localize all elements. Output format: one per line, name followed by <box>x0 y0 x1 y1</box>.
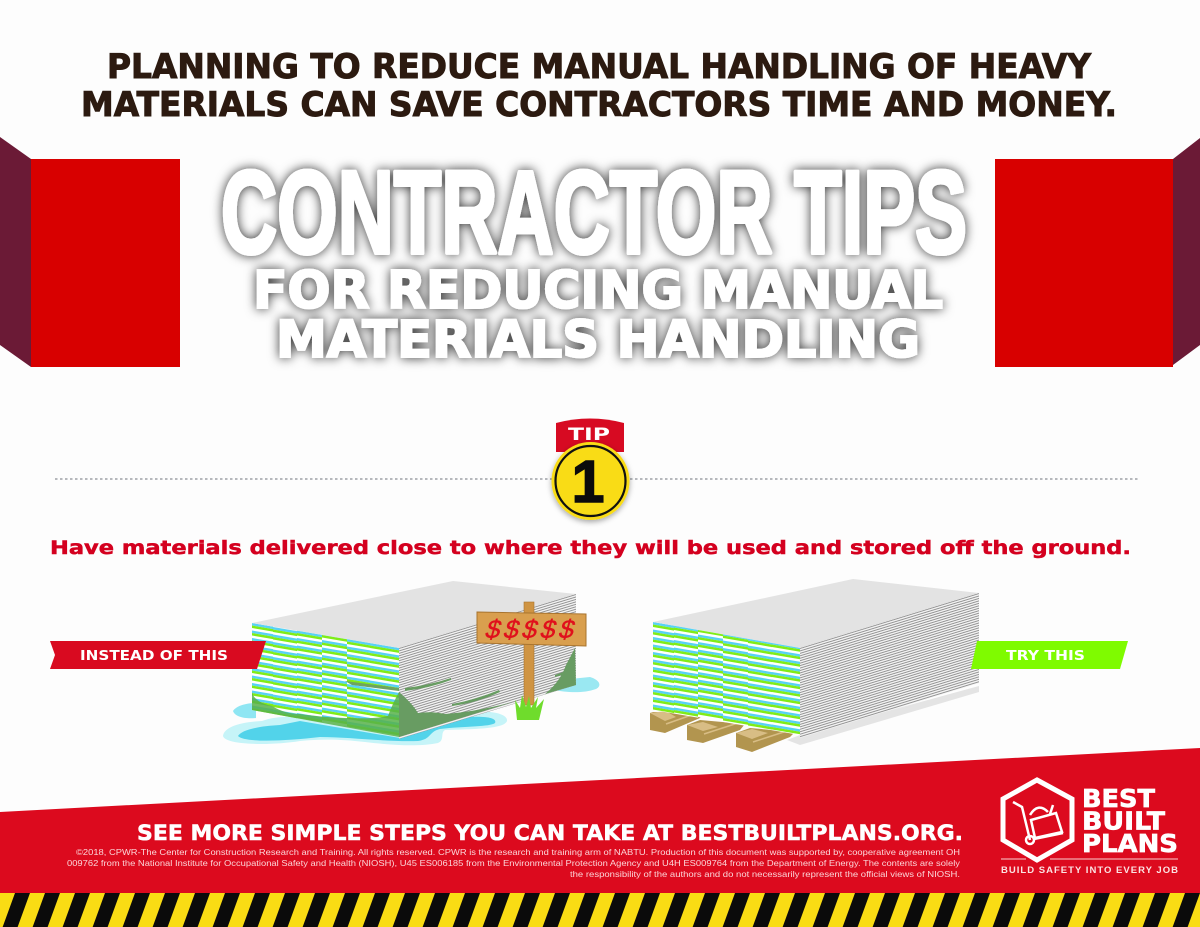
icon: hand truck <box>1013 802 1063 844</box>
instead of this label <box>50 641 266 669</box>
sign post <box>524 602 534 705</box>
stack front columns <box>252 623 399 738</box>
intro heading: PLANNING TO REDUCE MANUAL HANDLING OF HEAVY <box>107 47 1092 86</box>
main title <box>221 147 967 370</box>
tip badge <box>552 418 630 520</box>
stack side <box>800 593 979 738</box>
water puddles <box>223 677 599 745</box>
wet damage: front <box>252 681 399 737</box>
legal text: the responsibility of the authors and do not necessarily represent the official views of NIOSH. <box>570 869 960 879</box>
illustration: drywall stack on pallets <box>650 579 979 752</box>
try this label <box>971 641 1128 669</box>
grass <box>515 695 544 720</box>
intro heading: MATERIALS CAN SAVE CONTRACTORS TIME AND MONEY. <box>81 85 1117 124</box>
legal text: 009762 from the National Institute for Occupational Safety and Health (NIOSH), U45 ES006185 from the Environmental Protection Agency and U4H ES009764 from the Department of Energy. The contents are solely <box>67 858 961 868</box>
tip ribbon: TIP <box>568 425 610 445</box>
dotted divider <box>55 478 1138 480</box>
logo wordmark <box>1082 784 1178 858</box>
stack top <box>252 581 576 648</box>
logo wordmark: BUILT <box>1082 806 1165 836</box>
logo: best built plans <box>1001 780 1178 876</box>
instead of this label: INSTEAD OF THIS <box>80 648 228 664</box>
try this label: TRY THIS <box>1006 648 1085 664</box>
shadow under stack <box>787 686 979 745</box>
wet damage: side <box>399 648 576 737</box>
stack front columns <box>653 622 800 737</box>
tip text: Have materials delivered close to where they will be used and stored off the ground. <box>50 537 1131 559</box>
hazard stripe <box>0 893 1200 927</box>
footer call to action: SEE MORE SIMPLE STEPS YOU CAN TAKE AT BESTBUILTPLANS.ORG. <box>137 821 963 845</box>
left red ribbon <box>0 137 180 367</box>
logo hexagon <box>1003 780 1072 860</box>
pallets <box>650 711 795 752</box>
sign board: $$$$$ <box>482 614 579 644</box>
tip number: 1 <box>572 449 604 515</box>
logo wordmark: BEST <box>1082 784 1155 813</box>
intro heading <box>81 47 1117 124</box>
legal text: ©2018, CPWR-The Center for Construction Research and Training. All rights reserved. CPWR is the research and training arm of NABTU. Production of this document was supported by, cooperative agreement OH <box>76 847 960 857</box>
right red ribbon <box>995 138 1200 367</box>
legal text <box>67 847 961 879</box>
stack top <box>653 579 979 648</box>
logo wordmark: PLANS <box>1082 829 1178 858</box>
logo tagline: BUILD SAFETY INTO EVERY JOB <box>1001 865 1178 876</box>
logo rule <box>1001 858 1178 860</box>
illustration: wet drywall stack on ground <box>223 581 599 745</box>
main title: FOR REDUCING MANUAL <box>253 261 943 321</box>
footer band <box>0 748 1200 893</box>
stack side <box>399 594 576 739</box>
main title: MATERIALS HANDLING <box>276 311 920 370</box>
